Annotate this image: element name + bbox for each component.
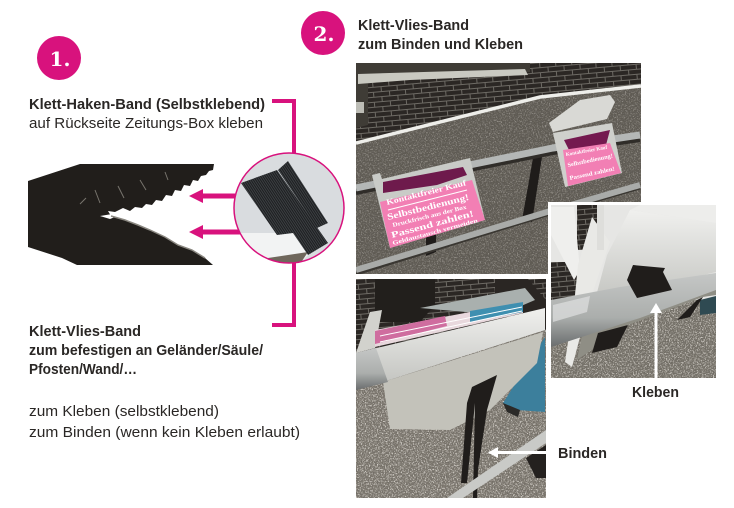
text block: Klett-Vlies-Band: zum befestigen an Geländer/Säule/ bbox=[29, 342, 264, 359]
photo: strap tied to rail bbox=[356, 279, 546, 498]
heading: Klett-Haken-Band: auf Rückseite Zeitungs-Box kleben bbox=[29, 115, 263, 132]
text block: usage options: zum Binden (wenn kein Kleben erlaubt) bbox=[29, 424, 300, 441]
text block: Klett-Vlies-Band: Klett-Vlies-Band bbox=[29, 323, 141, 340]
card text: large sign: Druckfrisch aus der Box bbox=[392, 205, 467, 229]
arrow: Kleben pointer bbox=[650, 303, 662, 378]
heading: Klett-Haken-Band bbox=[29, 96, 265, 132]
text block: Klett-Vlies-Band: Pfosten/Wand/… bbox=[29, 361, 137, 378]
bracket: connector lines bbox=[272, 101, 294, 325]
card text: large sign: Geldaustausch vermeiden bbox=[392, 218, 479, 247]
heading: step 2: zum Binden und Kleben bbox=[358, 36, 523, 53]
icon: magnified velcro on box back bbox=[234, 153, 344, 264]
card text: small sign: Passend zahlen! bbox=[569, 167, 615, 182]
photo: tape glued to rail bbox=[551, 205, 716, 378]
arrow: Binden pointer bbox=[488, 447, 546, 458]
card text: large sign: Selbstbedienung! bbox=[386, 192, 470, 222]
badge: step 1 bbox=[37, 36, 81, 80]
text block: usage options: zum Kleben (selbstklebend) bbox=[29, 403, 219, 420]
text block: Klett-Vlies-Band bbox=[29, 323, 264, 378]
photo: velcro hook and loop close-up bbox=[28, 164, 214, 265]
card text: small sign bbox=[565, 146, 615, 182]
badge: step 2 bbox=[301, 11, 345, 55]
card text: small sign: Kontaktfreier Kauf bbox=[565, 146, 608, 158]
arrow: lower pointer to loop band bbox=[189, 225, 242, 239]
photo frame gap bbox=[356, 202, 641, 279]
text block: usage options bbox=[29, 403, 300, 441]
card text: large sign: Passend zahlen! bbox=[390, 208, 475, 240]
arrow: upper pointer to hook band bbox=[189, 189, 238, 203]
card text: small sign: Selbstbedienung! bbox=[567, 154, 613, 169]
card text: large sign: Kontaktfreier Kauf bbox=[385, 178, 467, 207]
heading: step 2 bbox=[358, 17, 523, 53]
heading: step 2: Klett-Vlies-Band bbox=[358, 17, 469, 34]
label: Binden: Binden bbox=[558, 445, 607, 462]
badge: step 2: 2. bbox=[314, 22, 334, 46]
card text: large sign bbox=[385, 178, 479, 247]
badge: step 1: 1. bbox=[50, 47, 70, 71]
photo: boxes mounted on railing bbox=[356, 63, 641, 274]
heading: Klett-Haken-Band: Klett-Haken-Band (Selbstklebend) bbox=[29, 96, 265, 113]
label: Kleben: Kleben bbox=[632, 384, 679, 401]
